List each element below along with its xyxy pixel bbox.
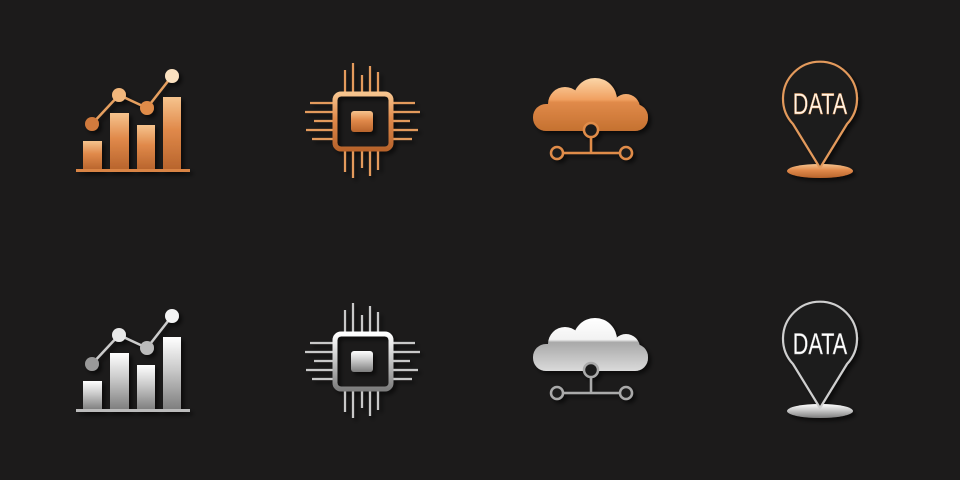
icon: silver chip	[305, 303, 420, 418]
icon: orange chip	[305, 63, 420, 178]
text: DATA silver: DATA	[793, 326, 848, 361]
icon: orange cloud network	[533, 78, 648, 159]
text: DATA: DATA	[793, 86, 848, 121]
icon: orange bar chart	[76, 69, 190, 172]
icon: silver bar chart	[76, 309, 190, 412]
icon: orange data pin	[783, 62, 857, 178]
icon: silver cloud network	[533, 318, 648, 399]
icon: silver data pin	[783, 302, 857, 418]
